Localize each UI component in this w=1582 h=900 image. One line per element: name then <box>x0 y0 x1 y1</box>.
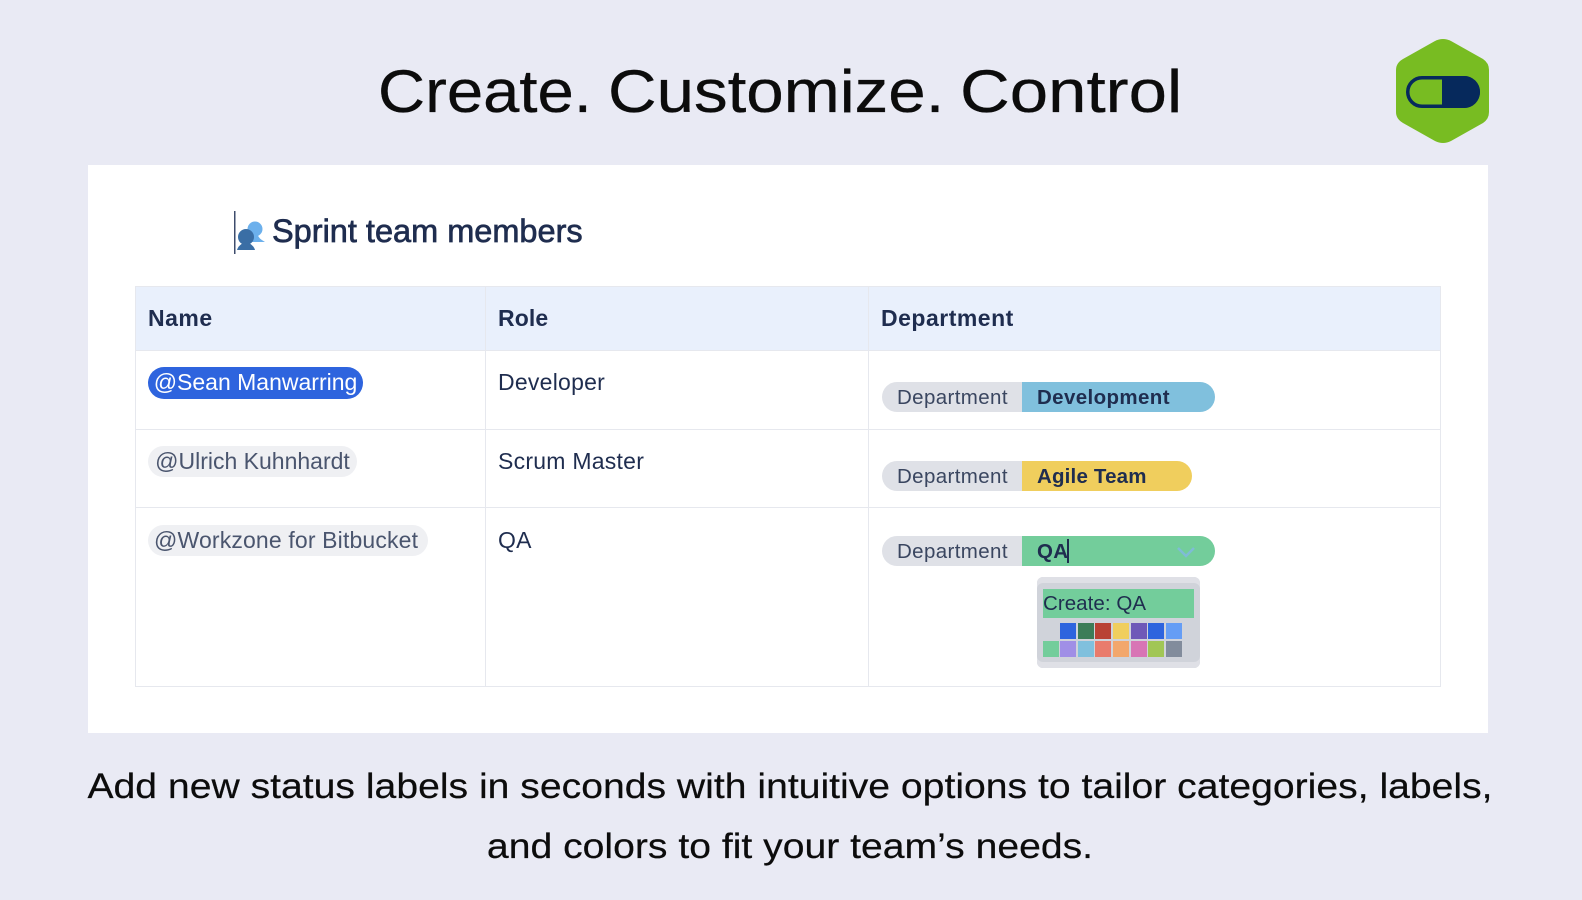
status value <box>1022 461 1192 491</box>
panel: sprint team table card <box>88 165 1488 733</box>
status value <box>1022 536 1215 566</box>
role: scrum master: Scrum Master <box>498 448 644 474</box>
column header: department: Department <box>881 305 1014 331</box>
title: Create. <box>378 58 592 125</box>
icon: team members <box>234 211 265 254</box>
mention: Ulrich Kuhnhardt: @Ulrich Kuhnhardt <box>155 448 350 474</box>
icon: chevron <box>1177 547 1195 558</box>
status value <box>1022 382 1215 412</box>
create option: Create: QA <box>1043 592 1146 615</box>
mention: Sean Manwarring: @Sean Manwarring <box>154 369 357 395</box>
popup: create status and colour picker <box>1037 577 1200 668</box>
department status: agile team <box>882 461 1192 491</box>
status key <box>882 382 1022 412</box>
status key: Department <box>897 465 1008 488</box>
icon: toggle hexagon <box>1396 39 1489 143</box>
column header: role: Role <box>498 305 548 331</box>
role: QA: QA <box>498 527 532 553</box>
department status: QA editing <box>882 536 1215 566</box>
table <box>136 287 1440 350</box>
caption: Add new status labels in seconds with intuitive options to tailor categories, labels, <box>87 767 1492 806</box>
create option <box>1043 589 1194 618</box>
column header: name: Name <box>148 305 213 331</box>
status value: Development <box>1037 386 1170 409</box>
status key <box>882 536 1022 566</box>
mention: Workzone for Bitbucket: @Workzone for Bitbucket <box>154 527 418 553</box>
role: developer: Developer <box>498 369 605 395</box>
title: Customize. <box>608 58 944 125</box>
caption <box>87 767 1492 866</box>
heading: sprint team members <box>234 211 583 254</box>
status value: Agile Team <box>1037 465 1147 488</box>
table header row <box>136 286 1441 350</box>
caption: and colors to fit your team’s needs. <box>486 827 1093 866</box>
title: Control <box>960 58 1182 125</box>
status key <box>882 461 1022 491</box>
heading text: Sprint team members <box>272 213 583 249</box>
status key: Department <box>897 386 1008 409</box>
status key: Department <box>897 540 1008 563</box>
status value: QA <box>1037 540 1068 563</box>
colour swatches <box>1043 623 1182 657</box>
title <box>378 58 1182 125</box>
text cursor <box>1067 539 1068 563</box>
department status: development <box>882 382 1215 412</box>
